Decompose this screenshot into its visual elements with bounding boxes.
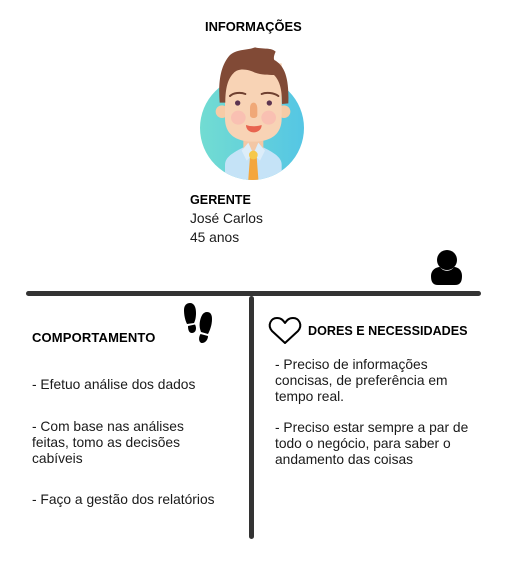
- need item 1: concisas, de preferência em: [275, 373, 448, 388]
- role label: GERENTE: [190, 193, 251, 207]
- behaviour item 2: cabíveis: [32, 451, 83, 466]
- heading: comportamento: COMPORTAMENTO: [32, 330, 156, 345]
- behaviour item 2: - Com base nas análises: [32, 419, 184, 434]
- need item 2: todo o negócio, para saber o: [275, 436, 451, 451]
- icon: heart: [268, 317, 302, 344]
- icon: footprints: [184, 303, 212, 343]
- heading: dores e necessidades: DORES E NECESSIDADES: [308, 324, 468, 338]
- icon: person: [431, 250, 462, 285]
- need item 1: tempo real.: [275, 389, 344, 404]
- vertical divider: [249, 296, 254, 539]
- name: José Carlos: [190, 211, 263, 226]
- need item 2: [275, 420, 468, 467]
- horizontal divider: [26, 291, 481, 296]
- behaviour item 1: - Efetuo análise dos dados: [32, 377, 195, 392]
- behaviour item 2: [32, 419, 184, 466]
- need item 2: - Preciso estar sempre a par de: [275, 420, 468, 435]
- need item 1: [275, 357, 448, 404]
- behaviour item 2: feitas, tomo as decisões: [32, 435, 180, 450]
- panel: comportamento: [32, 330, 215, 507]
- age: 45 anos: [190, 230, 239, 245]
- icon: manager avatar: [200, 47, 304, 180]
- behaviour item 3: - Faço a gestão dos relatórios: [32, 492, 215, 507]
- need item 1: - Preciso de informações: [275, 357, 428, 372]
- need item 2: andamento das coisas: [275, 452, 413, 467]
- title: INFORMAÇÕES: [205, 19, 302, 34]
- panel: dores e necessidades: [275, 324, 468, 467]
